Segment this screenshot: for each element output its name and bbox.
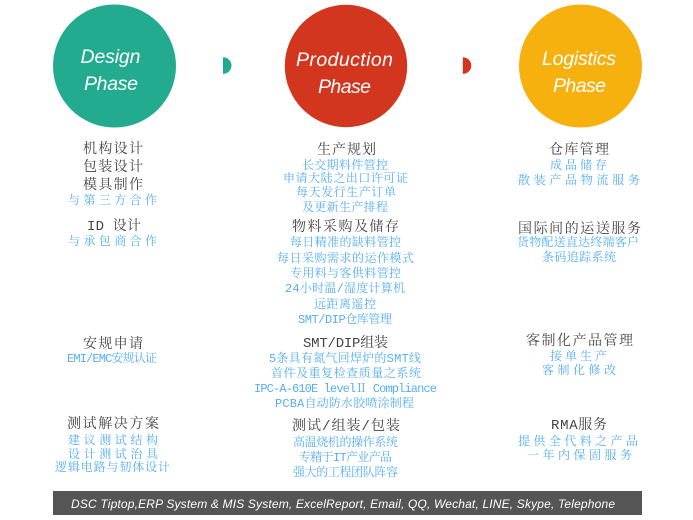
- production: SMT/DIP assembly block: PCBA自动防水胶喷涂制程: [275, 395, 414, 411]
- production: purchasing and storage block: 24小时温/湿度计算机: [285, 280, 405, 296]
- logistics: international shipping block: 货物配送直达终端客户: [517, 234, 639, 250]
- logistics: customised product block: 接单生产: [550, 348, 607, 364]
- production: test, assembly, packing block: 专精于IT产业产品: [299, 449, 392, 465]
- production: test, assembly, packing block: 强大的工程团队阵容: [293, 464, 398, 480]
- design: compliance block: EMI/EMC安规认证: [67, 350, 157, 366]
- production: SMT/DIP assembly block: [254, 334, 437, 411]
- design: mechanical design block: 模具制作: [83, 176, 143, 194]
- logistics: RMA block: 提供全代料之产品: [518, 433, 638, 449]
- production: purchasing and storage block: 专用料与客供料管控: [290, 265, 401, 281]
- circle: Design Phase: Design: [80, 46, 140, 68]
- production: test, assembly, packing block: 测试/组装/包装: [292, 417, 400, 435]
- design: test solutions block: 逻辑电路与韧体设计: [55, 459, 170, 475]
- production: purchasing and storage block: [277, 218, 414, 327]
- design: mechanical design block: 机构设计: [83, 140, 143, 158]
- production: planning block: 及更新生产排程: [302, 199, 388, 215]
- logistics: RMA block: [518, 417, 638, 463]
- production: purchasing and storage block: 物料采购及储存: [292, 218, 399, 236]
- logistics: customised product block: 客制化产品管理: [526, 332, 633, 350]
- design: mechanical design block: [68, 140, 157, 208]
- production: SMT/DIP assembly block: SMT/DIP组装: [303, 334, 388, 352]
- logistics: warehouse block: 成品储存: [550, 157, 607, 173]
- design: mechanical design block: 包装设计: [83, 158, 143, 176]
- circle: Production Phase: Phase: [318, 76, 371, 98]
- design: mechanical design block: 与第三方合作: [68, 192, 157, 208]
- production: test, assembly, packing block: [292, 417, 400, 480]
- circle: Production Phase: [285, 5, 407, 127]
- production: SMT/DIP assembly block: 5条具有氮气回焊炉的SMT线: [269, 350, 421, 366]
- arrow: design to production: [223, 57, 232, 74]
- logistics: international shipping block: 条码追踪系统: [542, 249, 616, 265]
- logistics: RMA block: 一年内保固服务: [527, 447, 632, 463]
- design: ID design block: [68, 217, 157, 249]
- design: test solutions block: 建议测试结构: [68, 432, 158, 448]
- circle: Production Phase: Production: [296, 49, 393, 71]
- design: compliance block: 安规申请: [83, 335, 143, 353]
- footer bar: systems list: [53, 491, 642, 515]
- logistics: warehouse block: [518, 142, 640, 188]
- logistics: warehouse block: 散装产品物流服务: [518, 172, 640, 188]
- production: planning block: 每天发行生产订单: [296, 184, 396, 200]
- circle: Design Phase: Phase: [84, 73, 138, 95]
- logistics: international shipping block: [517, 221, 641, 265]
- production: planning block: [283, 141, 408, 215]
- production: purchasing and storage block: 每日精准的缺料管控: [290, 234, 401, 250]
- logistics: customised product block: 客制化修改: [542, 362, 616, 378]
- production: planning block: 申请大陆之出口许可证: [283, 170, 408, 186]
- logistics: warehouse block: 仓库管理: [549, 142, 609, 159]
- design: test solutions block: 测试解决方案: [67, 416, 159, 433]
- logistics: RMA block: RMA服务: [551, 417, 607, 434]
- production: purchasing and storage block: 每日采购需求的运作模式: [277, 250, 414, 266]
- design: ID design block: 与承包商合作: [68, 233, 157, 249]
- arrow: production to logistics: [463, 57, 471, 74]
- production: SMT/DIP assembly block: IPC-A-610E levelⅡ Compliance: [254, 382, 437, 396]
- circle: Logistics Phase: [519, 4, 642, 128]
- production: test, assembly, packing block: 高温烧机的操作系统: [293, 434, 398, 450]
- logistics: international shipping block: 国际间的运送服务: [518, 221, 641, 238]
- design: ID design block: ID 设计: [87, 217, 141, 235]
- production: SMT/DIP assembly block: 首件及重复检查质量之系统: [271, 365, 421, 381]
- production: purchasing and storage block: SMT/DIP仓库管理: [298, 311, 392, 327]
- design: compliance block: [67, 335, 157, 366]
- production: planning block: 长交期料件管控: [302, 157, 388, 173]
- footer bar: systems list: DSC Tiptop,ERP System & MIS System, ExcelReport, Email, QQ, Wechat, LINE, Skype, Telephone: [71, 497, 615, 511]
- design: test solutions block: 设计测试治具: [68, 446, 159, 462]
- logistics: customised product block: [526, 332, 633, 378]
- circle: Logistics Phase: Phase: [553, 75, 606, 97]
- production: planning block: 生产规划: [317, 141, 376, 159]
- design: test solutions block: [55, 416, 170, 475]
- circle: Logistics Phase: Logistics: [542, 48, 616, 70]
- circle: Design Phase: [53, 4, 176, 128]
- production: purchasing and storage block: 远距离遥控: [314, 296, 376, 312]
